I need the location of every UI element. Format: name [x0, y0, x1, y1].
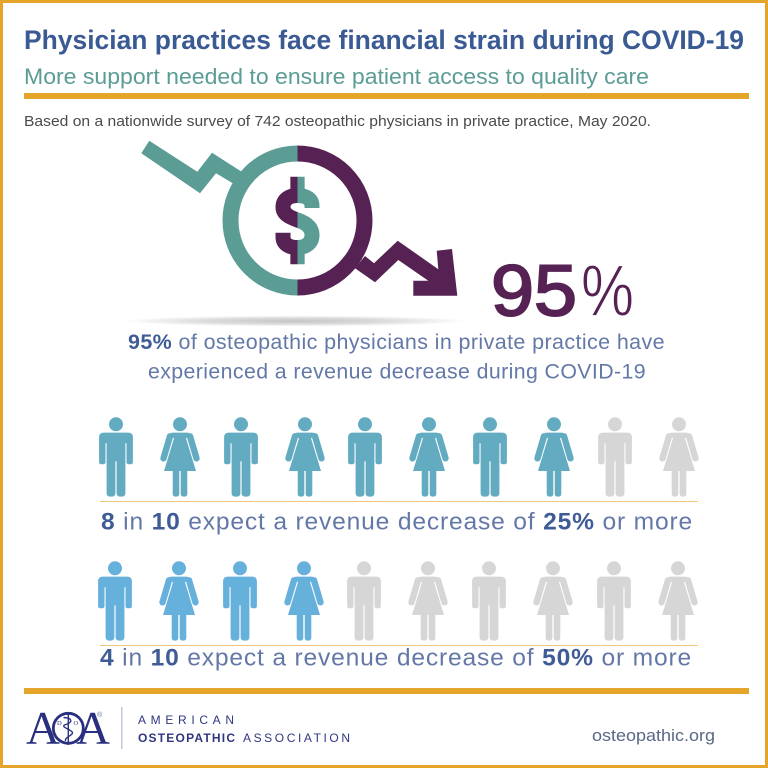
logo divider: [121, 707, 122, 749]
logo initial O: O: [74, 720, 78, 727]
shadow: [123, 316, 467, 326]
percent sign: %: [581, 252, 634, 332]
caption: 8 in 10: 8 in 10 expect a revenue decrease of 25% or more: [101, 508, 693, 536]
icon: teal falling line: [141, 141, 242, 193]
digits: 95: [491, 252, 577, 332]
association name: [138, 713, 350, 745]
description line 1: 95% of osteopathic physicians in private practice have: [128, 330, 665, 354]
big statistic: [491, 252, 634, 332]
icon: purple falling arrow: [355, 241, 457, 296]
survey note: Based on a nationwide survey of 742 osteopathic physicians in private practice, May 2020.: [24, 114, 651, 130]
caption: 4 in 10: 4 in 10 expect a revenue decrease of 50% or more: [100, 644, 692, 672]
footer rule: [24, 688, 749, 694]
pictogram row: 8 in 10: [99, 417, 696, 497]
logo letter A right: A: [76, 702, 110, 754]
logo staff: [64, 712, 73, 745]
icon: dollar sign purple half: [276, 176, 298, 264]
logo registered mark: ®: [97, 711, 103, 719]
website: osteopathic.org: [592, 726, 715, 745]
american: AMERICAN: [138, 713, 234, 727]
icon: dollar sign teal half: [298, 176, 320, 264]
header rule: [24, 93, 749, 99]
statistic description: [128, 330, 665, 384]
icon: dollar magnifier with falling arrow: [123, 141, 467, 326]
association: ASSOCIATION: [243, 731, 350, 745]
title: Physician practices face financial strain during COVID-19: [24, 25, 744, 55]
pictogram row: 4 in 10: [98, 561, 695, 641]
icon: purple half ring: [298, 146, 372, 296]
description line 2: experienced a revenue decrease during COVID-19: [148, 360, 646, 384]
rule under row 1: [100, 501, 698, 502]
logo letter A left: A: [26, 702, 60, 754]
subtitle: More support needed to ensure patient access to quality care: [24, 64, 649, 89]
logo: AOA emblem: [26, 702, 110, 754]
logo circle O: [53, 713, 83, 743]
osteopathic: OSTEOPATHIC: [138, 731, 235, 745]
rule under row 2: [100, 645, 698, 646]
logo initial D: D: [57, 720, 62, 727]
icon: teal half ring: [222, 146, 298, 296]
